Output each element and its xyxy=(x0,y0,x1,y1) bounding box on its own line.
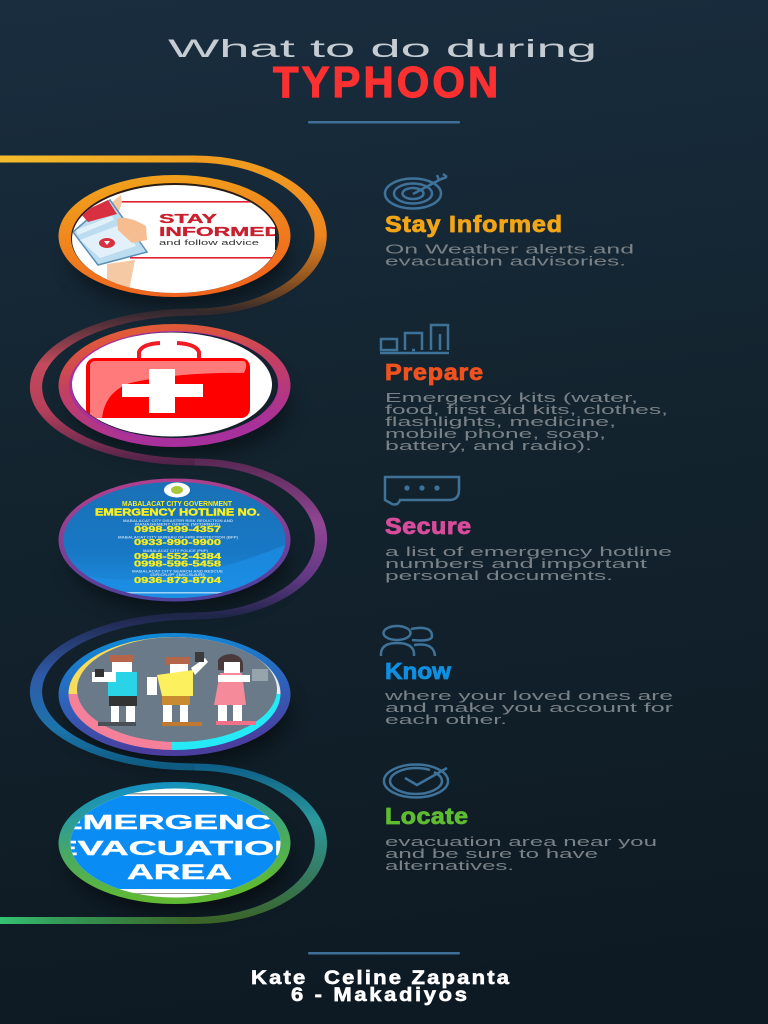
medallion: emergency hotline: 0933-990-9900 xyxy=(134,537,221,547)
footer credit xyxy=(251,967,509,1006)
medallion: emergency hotline: MANAGEMENT OFFICE (MCDRRMO) xyxy=(135,522,221,526)
medallion: evacuation area xyxy=(52,782,302,904)
medallion: emergency hotline: GROUP (MCSAR) xyxy=(150,573,206,577)
medallion: evacuation area: AREA xyxy=(127,861,232,884)
step: prepare: Emergency kits (water, xyxy=(385,390,638,405)
step: prepare: mobile phone, soap, xyxy=(385,426,606,441)
title xyxy=(168,35,597,107)
medallion: evacuation area: EMERGENCY xyxy=(58,812,297,834)
medallion: emergency hotline: 0948-552-4384 xyxy=(134,551,221,561)
step: know: each other. xyxy=(385,712,507,727)
step: stay informed: Stay Informed xyxy=(385,212,562,238)
medallion: emergency hotline: 0998-596-5458 xyxy=(134,558,221,568)
medallion: emergency hotline: MABALACAT CITY DISASTER RISK REDUCTION AND xyxy=(123,519,233,523)
icon: speech bubble xyxy=(385,477,459,504)
step: locate: Locate xyxy=(385,804,468,830)
medallion: stay informed: INFORMED xyxy=(159,225,281,239)
step: stay informed: On Weather alerts and xyxy=(385,242,634,256)
step: know xyxy=(381,626,674,727)
step: stay informed: evacuation advisories. xyxy=(385,254,626,268)
medallion: emergency hotline: MABALACAT CITY GOVERNMENT xyxy=(122,499,232,508)
medallion: first aid kit xyxy=(58,324,290,447)
person: right girl xyxy=(214,654,268,725)
icon: target xyxy=(385,174,447,208)
step: locate: and be sure to have xyxy=(385,846,598,861)
medallion: emergency hotline: 0998-999-4357 xyxy=(134,524,221,534)
step: know: where your loved ones are xyxy=(383,688,673,703)
step: prepare: Prepare xyxy=(385,360,483,386)
medallion: emergency hotline: MABALACAT CITY SEARCH AND RESCUE xyxy=(132,570,224,574)
icon: bars xyxy=(380,325,449,353)
title: TYPHOON xyxy=(273,58,498,107)
step: locate: alternatives. xyxy=(385,858,514,873)
icon: people xyxy=(381,626,435,656)
step: know: and make you account for xyxy=(385,700,674,715)
footer credit: Kate Celine Zapanta xyxy=(251,967,509,989)
winding ribbon xyxy=(0,159,321,921)
step: stay informed xyxy=(385,174,634,268)
step: know: Know xyxy=(385,659,451,685)
step: prepare: battery, and radio). xyxy=(385,438,592,453)
step: prepare xyxy=(380,325,668,453)
title: What to do during xyxy=(168,35,597,63)
step: secure: personal documents. xyxy=(385,568,613,583)
medallion: emergency hotline xyxy=(58,478,290,603)
step: prepare: flashlights, medicine, xyxy=(385,414,616,429)
medallion: stay informed: STAY xyxy=(159,212,218,226)
step: secure xyxy=(385,477,672,583)
medallion: emergency hotline: MABALACAT CITY POLICE (PNP) xyxy=(143,549,209,553)
step: secure: a list of emergency hotline xyxy=(385,544,672,559)
medallion: stay informed: and follow advice xyxy=(159,238,259,247)
footer credit: 6 - Makadiyos xyxy=(291,984,467,1006)
step: locate xyxy=(384,764,657,873)
medallion: emergency hotline: 0936-873-8704 xyxy=(134,575,221,585)
drop shadows under medallions xyxy=(72,206,288,913)
person: middle boy xyxy=(147,652,208,726)
person: left boy xyxy=(92,655,137,726)
step: prepare: food, first aid kits, clothes, xyxy=(385,402,668,417)
medallion: emergency hotline: EMERGENCY HOTLINE NO. xyxy=(95,506,260,518)
step: locate: evacuation area near you xyxy=(385,834,657,849)
medallion: stay informed xyxy=(58,175,290,300)
icon: check circle xyxy=(384,764,448,798)
step: secure: Secure xyxy=(385,514,471,540)
medallion: emergency hotline: MABALACAT CITY BUREAU OF FIRE PROTECTION (BFP) xyxy=(118,536,239,540)
medallion: evacuation area: EVACUATION xyxy=(52,838,302,860)
step: secure: numbers and important xyxy=(385,556,648,571)
medallion: people xyxy=(58,630,290,758)
